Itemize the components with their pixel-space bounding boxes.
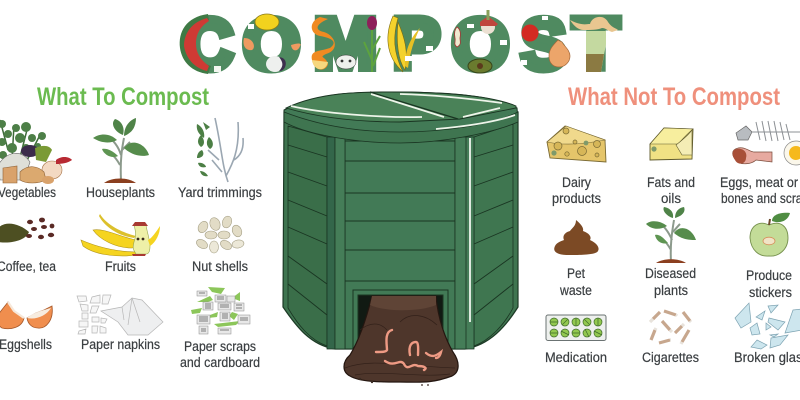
label: Nut shells: Nut shells — [192, 259, 248, 274]
label: Dairy products: Dairy — [562, 175, 591, 190]
heading: What To Compost: What To Compost — [37, 83, 210, 111]
worms — [376, 330, 441, 370]
label: Pet waste: waste — [559, 283, 592, 298]
icon: cigarettes — [650, 311, 691, 344]
label: Eggs, meat or bones and scraps — [720, 175, 800, 206]
label: Dairy products — [552, 175, 601, 206]
title: COMPOST: S — [521, 6, 566, 85]
title: COMPOST — [180, 5, 619, 85]
compost bin — [283, 92, 518, 386]
icon: yard trimmings — [197, 118, 243, 182]
title: COMPOST: P — [393, 5, 440, 84]
title: COMPOST: T — [573, 5, 619, 84]
icon: diseased plant — [646, 207, 696, 263]
highlight stripe — [469, 138, 471, 322]
label: Medication: Medication — [545, 350, 607, 365]
label: Fats and oils: Fats and — [647, 175, 695, 190]
title: COMPOST: O — [243, 6, 300, 85]
icon: paper napkins — [77, 295, 163, 335]
door — [353, 290, 448, 349]
label: Fats and oils — [647, 175, 695, 206]
compost pile — [344, 296, 458, 382]
icon: medication — [546, 315, 606, 340]
title: COMPOST: M — [314, 5, 377, 84]
icon: fats and oils — [650, 128, 693, 160]
icon: nut shells — [195, 215, 245, 253]
icon: pet waste — [554, 220, 599, 255]
label: Diseased plants — [645, 266, 696, 298]
label: Produce stickers: Produce — [746, 268, 792, 283]
icon: houseplant — [93, 118, 149, 183]
panel: what to compost items — [0, 118, 262, 370]
icon: dairy cheese — [547, 126, 606, 162]
icon: fruits — [81, 214, 160, 256]
title: COMPOST: C — [184, 6, 233, 85]
label: Diseased plants: Diseased — [645, 266, 696, 281]
label: Eggshells: Eggshells — [0, 337, 52, 352]
label: Produce stickers — [746, 268, 792, 300]
icon: paper scraps and cardboard — [191, 287, 250, 334]
side panels — [288, 124, 513, 349]
lid — [284, 92, 518, 141]
front panel — [345, 141, 455, 349]
icon: coffee and tea — [0, 218, 54, 243]
label: Vegetables: Vegetables — [0, 185, 56, 200]
label: Fats and oils: oils — [661, 191, 681, 206]
label: Houseplants: Houseplants — [86, 185, 155, 200]
label: Pet waste: Pet — [567, 266, 585, 281]
icon: eggshells — [0, 302, 52, 329]
label: Yard trimmings: Yard trimmings — [178, 185, 262, 200]
panel: what not to compost items — [545, 121, 800, 365]
label: Paper scraps and cardboard: and cardboard — [180, 355, 260, 370]
icon: broken glass — [735, 303, 800, 349]
label: Diseased plants: plants — [654, 283, 688, 298]
soil crumbs — [359, 378, 429, 386]
icon: eggs, meat, fish bones — [733, 121, 800, 165]
label: Fruits: Fruits — [105, 259, 136, 274]
icon: vegetables — [0, 120, 72, 184]
label: Dairy products: products — [552, 191, 601, 206]
label: Produce stickers: stickers — [749, 285, 792, 300]
label: Pet waste — [559, 266, 592, 298]
label: Paper napkins: Paper napkins — [81, 337, 160, 352]
lid highlights — [291, 94, 515, 129]
bin body — [283, 112, 518, 349]
label: Paper scraps and cardboard: Paper scraps — [184, 339, 256, 354]
icon: apple with sticker — [750, 213, 790, 256]
label: Cigarettes: Cigarettes — [642, 350, 699, 365]
title: COMPOST: O — [452, 6, 509, 85]
label: Paper scraps and cardboard — [180, 339, 260, 370]
